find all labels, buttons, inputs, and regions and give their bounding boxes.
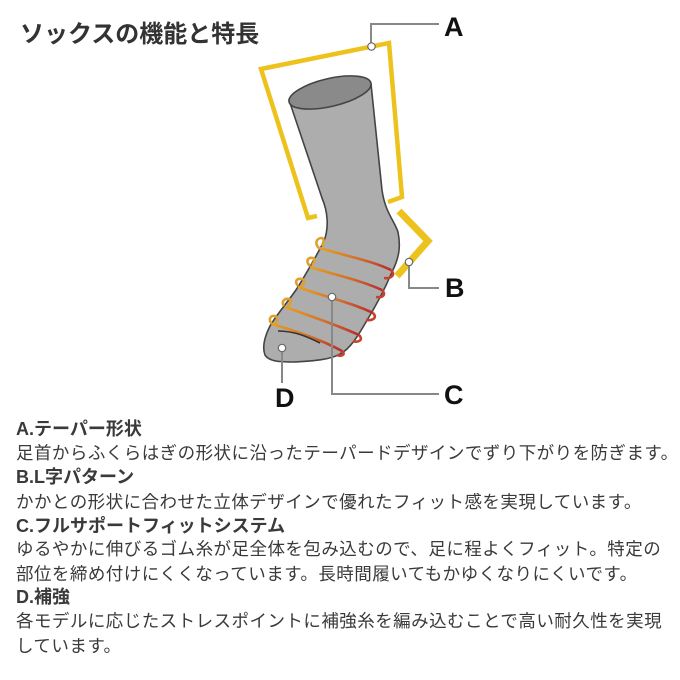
label B: B [445,273,464,303]
label C: C [444,380,464,410]
B heading: B.L字パターン [16,467,134,487]
C body line 1: ゆるやかに伸びるゴム糸が足全体を包み込むので、足に程よくフィット。特定の [16,539,661,559]
sock diagram [258,12,464,410]
leader B [409,262,439,288]
D body line 1: 各モデルに応じたストレスポイントに補強糸を編み込むことで高い耐久性を実現 [16,611,662,631]
B body: かかとの形状に合わせた立体デザインで優れたフィット感を実現しています。 [16,492,642,512]
sock opening [286,69,374,116]
marker dots [278,43,413,352]
A heading: A.テーパー形状 [16,419,142,439]
yellow bracket A [261,43,402,218]
D heading: D.補強 [16,587,70,607]
title: ソックスの機能と特長 [20,21,259,48]
band loops [270,238,324,324]
C heading: C.フルサポートフィットシステム [16,516,285,536]
support bands C [270,238,393,356]
leader D [281,348,283,383]
C body line 2: 部位を締め付けにくくなっています。長時間履いてもかゆくなりにくいです。 [16,564,638,584]
leader C [332,297,439,394]
leader A [371,24,439,46]
sock body [264,84,399,362]
A body: 足首からふくらはぎの形状に沿ったテーパードデザインでずり下がりを防ぎます。 [16,443,679,463]
leader lines [282,24,439,394]
D body line 2: しています。 [16,636,122,656]
yellow L bracket B [397,211,428,276]
bands [320,248,391,270]
label A: A [444,12,464,42]
toe reinforcement line D [278,331,320,343]
